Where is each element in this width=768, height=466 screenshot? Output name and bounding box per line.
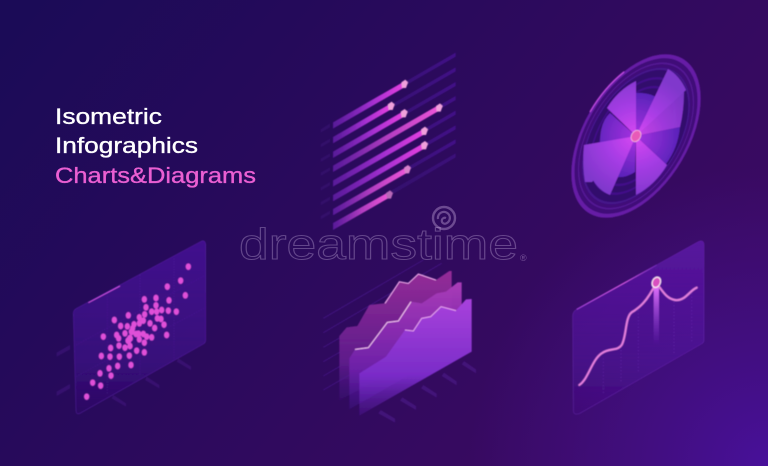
- watermark registered mark: ®: [520, 253, 527, 263]
- bar end caps: [386, 80, 443, 199]
- data line: [579, 283, 697, 385]
- peak marker: [650, 276, 662, 289]
- bright sectors: [583, 69, 686, 195]
- title: [55, 104, 256, 188]
- rim highlight: [590, 72, 624, 111]
- glass panel: [73, 241, 206, 414]
- dark sectors: [600, 93, 680, 177]
- axis ghost labels: [57, 345, 191, 407]
- highlight lines: [355, 274, 456, 349]
- title line: Charts&Diagrams: Charts&Diagrams: [55, 163, 256, 188]
- watermark wordmark: dreamstime: [239, 220, 518, 269]
- panel highlight edge: [88, 286, 120, 303]
- grid lines: [76, 258, 206, 393]
- watermark: dreamstime: [239, 207, 527, 269]
- title line: Isometric: Isometric: [55, 104, 162, 129]
- radial chart: isometric polar diagram: [573, 28, 699, 244]
- bar background tracks: [333, 53, 456, 229]
- scatter plot panel: [57, 241, 206, 414]
- glass panel: [573, 241, 704, 414]
- watermark swirl: [433, 207, 455, 229]
- chart hub: [629, 129, 643, 143]
- area chart: three layered isometric areas: [323, 260, 476, 423]
- area: back series: [339, 271, 452, 401]
- chart rings: [573, 28, 699, 244]
- axis ghost labels: [378, 361, 476, 423]
- panel highlight edge: [577, 265, 657, 309]
- left axis ghost labels: [321, 123, 330, 219]
- bar chart: isometric horizontal bars: [321, 53, 456, 230]
- title line: Infographics: Infographics: [55, 133, 198, 158]
- area: middle series: [349, 282, 462, 409]
- line chart panel: [573, 241, 704, 414]
- data points: [84, 263, 191, 400]
- area: front series: [359, 299, 472, 416]
- peak beam: [654, 287, 659, 345]
- background guide lines: [323, 260, 442, 390]
- vertical grid lines: [603, 293, 692, 393]
- bars: [333, 81, 439, 230]
